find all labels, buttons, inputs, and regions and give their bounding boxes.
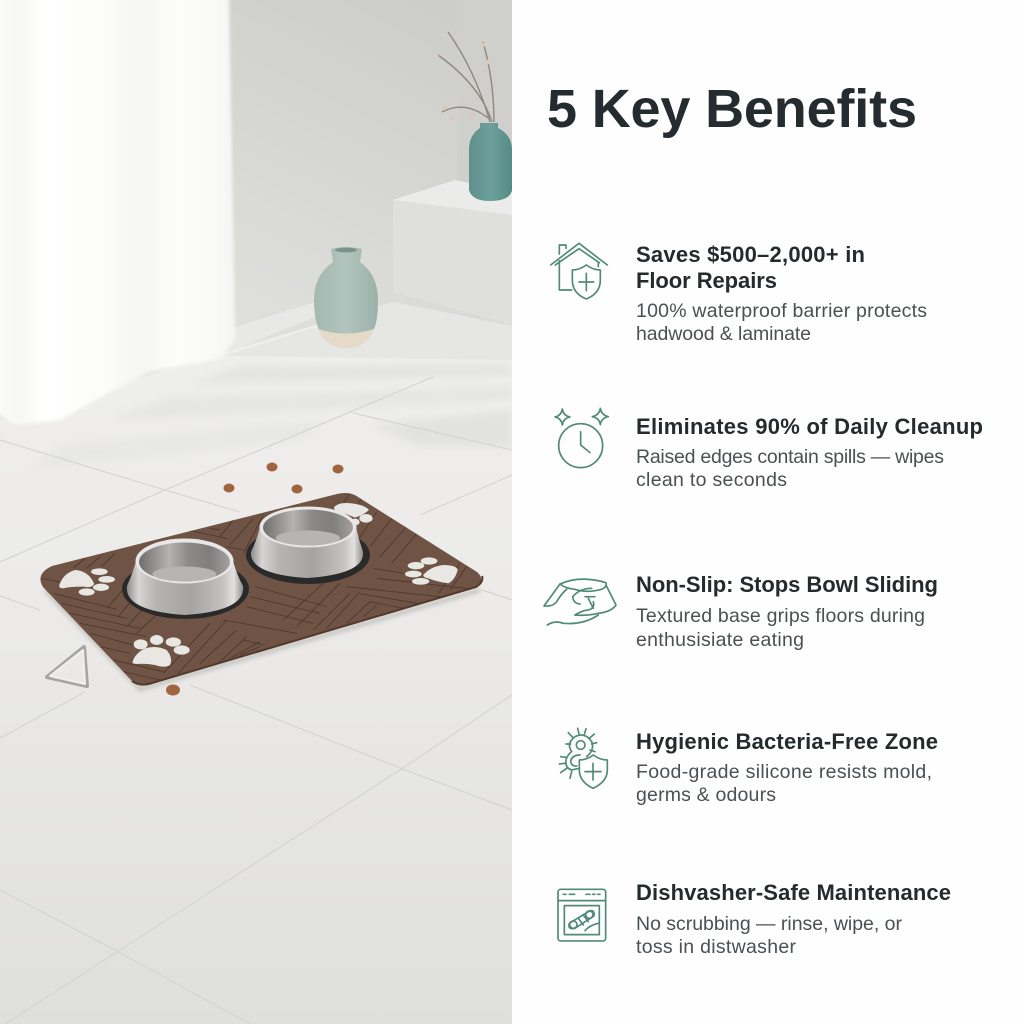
icon: dishwasher xyxy=(558,889,606,941)
paw bottom xyxy=(132,635,190,667)
benefit 1 xyxy=(551,242,927,345)
floor xyxy=(0,302,512,1024)
dog food mat xyxy=(40,493,482,685)
paw right xyxy=(405,557,458,585)
title: 5 Key Benefits xyxy=(547,79,917,139)
description line 2: hadwood & laminate xyxy=(636,323,811,345)
back floor area xyxy=(225,302,512,360)
description: 100% waterproof barrier protects xyxy=(636,300,927,322)
branches in teal vase xyxy=(435,32,494,122)
baseboard xyxy=(226,302,315,352)
paw left xyxy=(59,568,115,596)
alcove wall xyxy=(457,0,512,190)
icon: clock with sparkles xyxy=(555,408,608,468)
description line 2: toss in distwasher xyxy=(636,936,796,958)
pale vase on floor xyxy=(314,247,378,348)
description line 2: clean to seconds xyxy=(636,469,787,491)
description line 2: germs & odours xyxy=(636,784,776,806)
light and shadow bands on the floor xyxy=(30,364,512,470)
mat front edge xyxy=(132,576,482,685)
benefit 3 xyxy=(544,572,938,651)
paw top xyxy=(334,503,373,525)
metal triangle xyxy=(47,647,87,686)
description: Raised edges contain spills — wipes xyxy=(636,446,944,468)
heading: Eliminates 90% of Daily Cleanup xyxy=(636,414,983,439)
heading: Saves $500–2,000+ in xyxy=(636,242,865,267)
herringbone grooves xyxy=(42,493,480,680)
white text panel xyxy=(512,0,1024,1024)
description: Textured base grips floors during xyxy=(636,605,925,627)
heading: Hygienic Bacteria-Free Zone xyxy=(636,729,938,754)
description: Food-grade silicone resists mold, xyxy=(636,761,932,783)
paw prints xyxy=(59,503,458,667)
icon: hand gripping bowl xyxy=(544,579,616,625)
heading: Dishvasher-Safe Maintenance xyxy=(636,880,951,905)
steel bowl left xyxy=(122,538,249,619)
kibble pieces xyxy=(166,462,344,696)
benefit 5 xyxy=(558,880,951,958)
teal vase on plinth xyxy=(469,123,512,201)
icon: house with shield xyxy=(551,243,607,299)
icon: bacteria with shield xyxy=(559,728,607,788)
benefit 4 xyxy=(559,728,938,806)
description line 2: enthusisiate eating xyxy=(636,629,804,651)
mat shadow xyxy=(45,590,480,689)
heading: Non-Slip: Stops Bowl Sliding xyxy=(636,572,938,597)
back wall xyxy=(0,0,512,420)
benefit 2 xyxy=(555,408,983,491)
curtain xyxy=(0,0,235,425)
scene: photo of pet bowl mat in a bright room xyxy=(0,0,512,1024)
plinth xyxy=(393,180,512,325)
heading line 2: Floor Repairs xyxy=(636,268,777,293)
steel bowl right xyxy=(246,506,370,584)
floor tile joints xyxy=(0,377,512,1024)
description: No scrubbing — rinse, wipe, or xyxy=(636,913,902,935)
